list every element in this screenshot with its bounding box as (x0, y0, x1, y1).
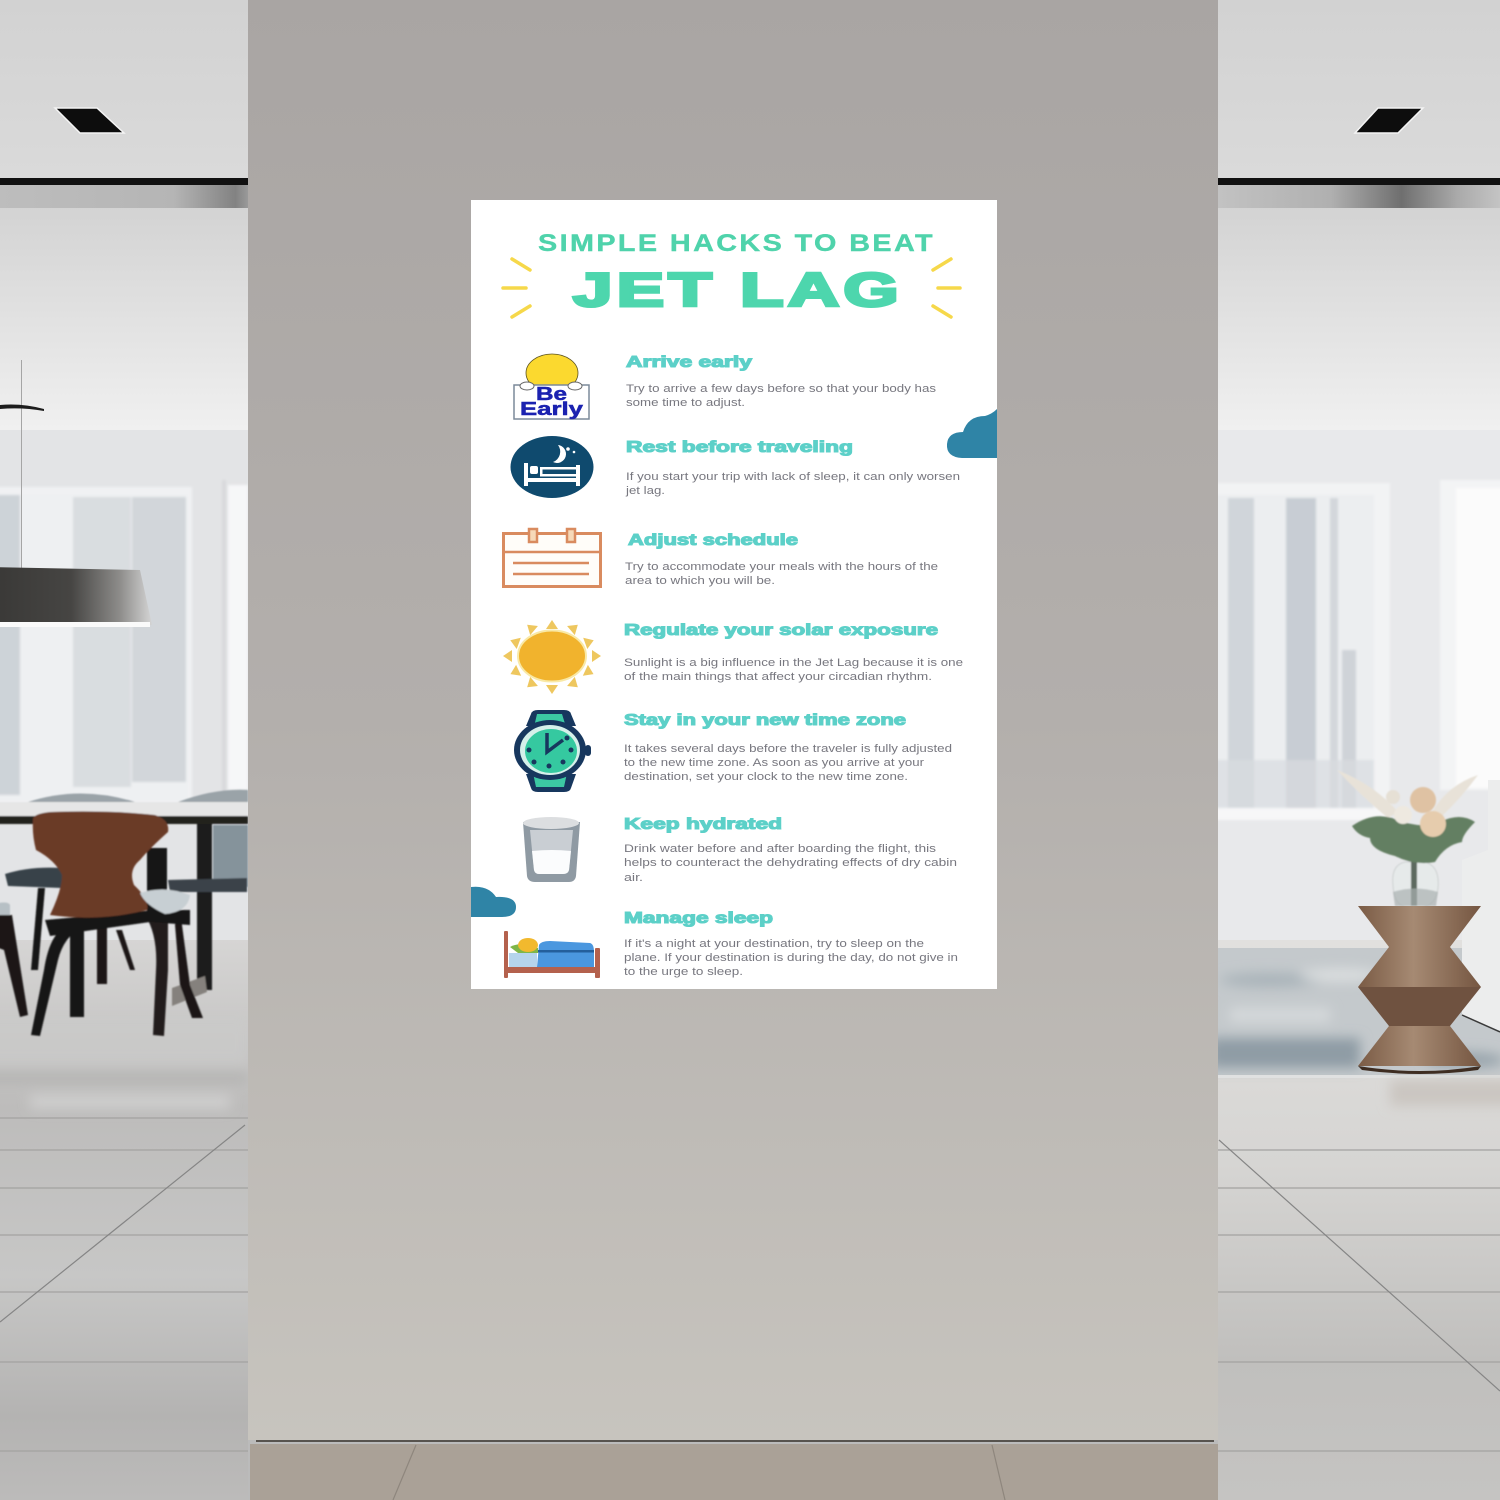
icon: water glass (523, 817, 580, 882)
heading: arrive early: Arrive early (626, 354, 753, 371)
decoration: left rays (503, 259, 530, 317)
text: sleep body: plane. If your destination is during the day, do not give in (624, 952, 958, 964)
text: time zone body: It takes several days before the traveler is fully adjusted (624, 743, 952, 755)
item: keep hydrated (624, 816, 957, 884)
text: solar body (624, 657, 963, 683)
text: adjust body: area to which you will be. (625, 575, 775, 587)
cloud right (947, 409, 997, 458)
text: hydrated body: helps to counteract the dehydrating effects of dry cabin (624, 857, 957, 869)
text: adjust body: Try to accommodate your meals with the hours of the (625, 561, 938, 573)
ceiling lamp (0, 360, 152, 627)
text: rest body (625, 471, 960, 497)
heading: adjust schedule: Adjust schedule (628, 532, 799, 549)
text: arrive early body: some time to adjust. (626, 397, 745, 409)
text: hydrated body: Drink water before and after boarding the flight, this (624, 843, 937, 855)
heading: regulate solar exposure: Regulate your solar exposure (624, 622, 939, 639)
text: hydrated body: air. (624, 872, 643, 884)
text: time zone body (624, 743, 952, 783)
icon: be early sign: Early (520, 399, 583, 419)
icon: calendar (504, 529, 600, 586)
item: adjust schedule (625, 532, 938, 587)
sofa (1462, 780, 1500, 1035)
rug (1210, 948, 1500, 1078)
item: regulate your solar exposure (624, 622, 963, 683)
icon: be early sign: Be (536, 384, 567, 404)
decoration: right rays (933, 259, 960, 317)
text: arrive early body (626, 383, 937, 409)
heading: rest before traveling: Rest before traveling (626, 439, 853, 456)
side stool (1358, 906, 1481, 1074)
icon: be early sign (514, 354, 589, 419)
background: right room (1210, 0, 1500, 1500)
icon: wristwatch (514, 710, 591, 792)
heading: keep hydrated: Keep hydrated (624, 816, 782, 833)
cloud left (471, 887, 516, 917)
text: sleep body (624, 938, 958, 978)
title: jet lag: JET LAG (573, 263, 903, 316)
text: time zone body: destination, set your clock to the new time zone. (624, 771, 908, 783)
heading: manage sleep: Manage sleep (624, 910, 773, 927)
poster panel (471, 200, 997, 989)
item: manage sleep (624, 910, 958, 978)
item: arrive early (626, 354, 937, 409)
icon: moon and bed (510, 436, 594, 498)
flower vase (1337, 770, 1478, 908)
title: simple hacks to beat: SIMPLE HACKS TO BEAT (538, 230, 935, 257)
item: rest before traveling (625, 439, 960, 497)
floor reflections left (0, 1020, 248, 1109)
floor tile lines (0, 1118, 1500, 1451)
text: hydrated body (624, 843, 957, 884)
text: arrive early body: Try to arrive a few days before so that your body has (626, 383, 937, 395)
heading: stay in your new time zone: Stay in your new time zone (624, 712, 907, 729)
text: solar body: Sunlight is a big influence in the Jet Lag because it is one (624, 657, 963, 669)
icon: sun (503, 620, 601, 694)
text: solar body: of the main things that affect your circadian rhythm. (624, 671, 932, 683)
background: left room (0, 0, 250, 1500)
text: sleep body: If it's a night at your destination, try to sleep on the (624, 938, 924, 950)
item: stay in your new time zone (624, 712, 952, 783)
floor under wall (250, 1444, 1218, 1500)
text: adjust body (625, 561, 938, 587)
gallery wall (248, 0, 1218, 1442)
text: rest body: jet lag. (625, 485, 665, 497)
dining table and chairs (0, 790, 248, 1036)
text: rest body: If you start your trip with lack of sleep, it can only worsen (626, 471, 960, 483)
icon: bed with sleeper (504, 931, 600, 978)
text: time zone body: to the new time zone. As soon as you arrive at your (624, 757, 924, 769)
text: sleep body: to the urge to sleep. (624, 966, 743, 978)
floor shadow right (1390, 1080, 1500, 1106)
